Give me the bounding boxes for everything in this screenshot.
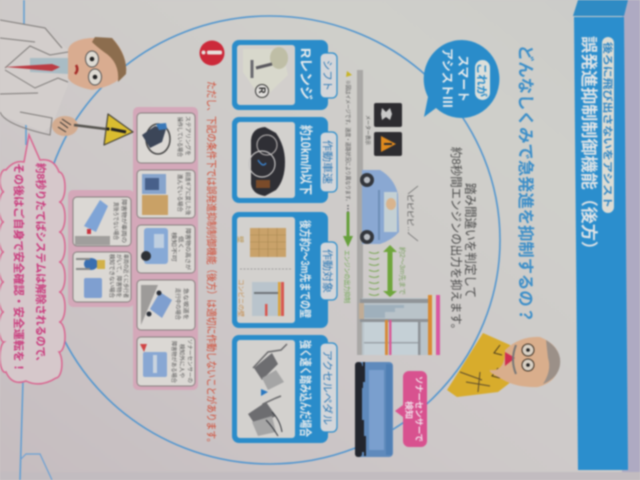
blue card: target: 後方約2～3m先までの壁 [298,220,313,318]
card: sonar outside: 障害物がある場合 [170,341,178,383]
card: low obstacle: 検知不可 [170,232,178,263]
car side view [360,170,399,244]
engine suppression arrow: エンジンの出力抑制 [343,250,352,303]
card: low obstacle: 障害物の高さが [184,228,192,270]
character: man in yellow [447,333,560,397]
meter icons [364,103,402,156]
pink scalloped bubble: その後はご自身で安全確認・安全運転を！ [12,163,26,373]
card: low obstacle: 低く、 [177,236,185,256]
blue card: shift: Rレンジ [298,48,314,100]
beep text: ピピピピ… [406,194,414,234]
card: not directly behind: 真後ろでない場合 [112,202,120,240]
card: steering: 操作している場合 [176,117,184,157]
blue card: target [232,212,337,328]
card: pedestrians [73,252,131,302]
explanation text [449,147,477,335]
sonar label [395,371,427,447]
blue card: shift: シフト [321,60,333,91]
card: pedestrians: がいて、障害物を [115,254,123,298]
sonar label: 検知 [404,401,414,419]
card: wall forward [137,170,195,218]
hand and stick [52,116,106,136]
corner outline at bottom left [20,454,52,480]
card: pedestrians: 車両の近くに歩行者 [122,254,130,299]
beep text [406,186,418,241]
pink scalloped bubble [0,135,65,384]
caution icon red [200,40,224,66]
rear view car [355,362,393,457]
card: wall forward: 進んでいる場合 [176,174,184,212]
blue card: accelerator pedal [232,335,337,443]
card: not directly behind [73,197,131,246]
vertical guide line [20,0,26,480]
big blue circle [40,16,500,464]
card: slope [137,280,195,330]
subtitle pill [601,37,614,213]
card: slope: 走行中の場合 [174,288,182,320]
explanation text: 約8秒間エンジンの出力を抑えます。 [449,147,464,335]
pink panel: exception list right [133,107,198,390]
warning sign [104,114,133,145]
card: sonar outside: ソナーセンサーの [186,339,193,383]
pink scalloped bubble: 約8秒りたてばシステムは解除されるので、 [34,163,48,367]
speech bubble: smart assist: スマート [456,55,470,102]
card: low obstacle [137,225,195,273]
card: steering [137,113,195,163]
blue card: target: 壁 [236,236,245,243]
speech bubble: smart assist [424,40,499,118]
caution note: ※図はイメージです。速度・道路状況により異なります。 [344,80,352,204]
card: pedestrians: 検知できない場合 [108,254,116,299]
blue card: speed: 作動車速 [321,140,334,185]
heading question: どんなしくみで急発進を抑制するの？ [516,45,536,323]
blue card: speed: 約10km/h以下 [298,125,314,195]
character: man in suit [0,20,126,136]
card: not directly behind: 障害物が車両の [120,199,128,243]
distance arrow [383,245,407,297]
explanation text: 踏み間違いを判定して [463,183,477,298]
road line [357,70,363,355]
blue card: accelerator pedal: アクセルペダル [321,350,334,425]
header band [573,0,628,470]
pink panel: exception list left [68,190,134,307]
blue card: target: 作動対象 [321,249,334,294]
title: 誤発進抑制制御機能（後方） [579,36,599,258]
subtitle pill: 後ろに飛び出さないをアシスト [601,42,614,208]
card: steering: ステアリングを [184,116,192,156]
card: slope: 急な坂道を [182,288,190,320]
card: sonar outside [137,337,195,386]
blue card: shift: R [257,87,267,94]
blue card: accelerator pedal: 強く速く踏み込んだ場合 [298,340,313,437]
card: sonar outside: 検知外に人や [178,344,186,378]
caution note [344,71,352,204]
speech bubble: smart assist: アシストⅢ [440,48,454,108]
card: wall forward: 前進ギアに戻した後 [184,172,192,215]
engine suppression arrow [343,205,353,303]
blue card: target: コンビニの壁 [237,279,246,317]
convenience store [359,295,440,355]
distance arrow: 約2～3m先まで [398,247,407,295]
sonar waves [369,252,379,296]
sonar label: ソナーセンサーで [414,376,424,442]
speech bubble: smart assist: これが [475,63,489,97]
blue card: shift [232,40,337,110]
meter icons: メーター表示 [364,115,372,145]
blue card: speed [232,117,337,203]
